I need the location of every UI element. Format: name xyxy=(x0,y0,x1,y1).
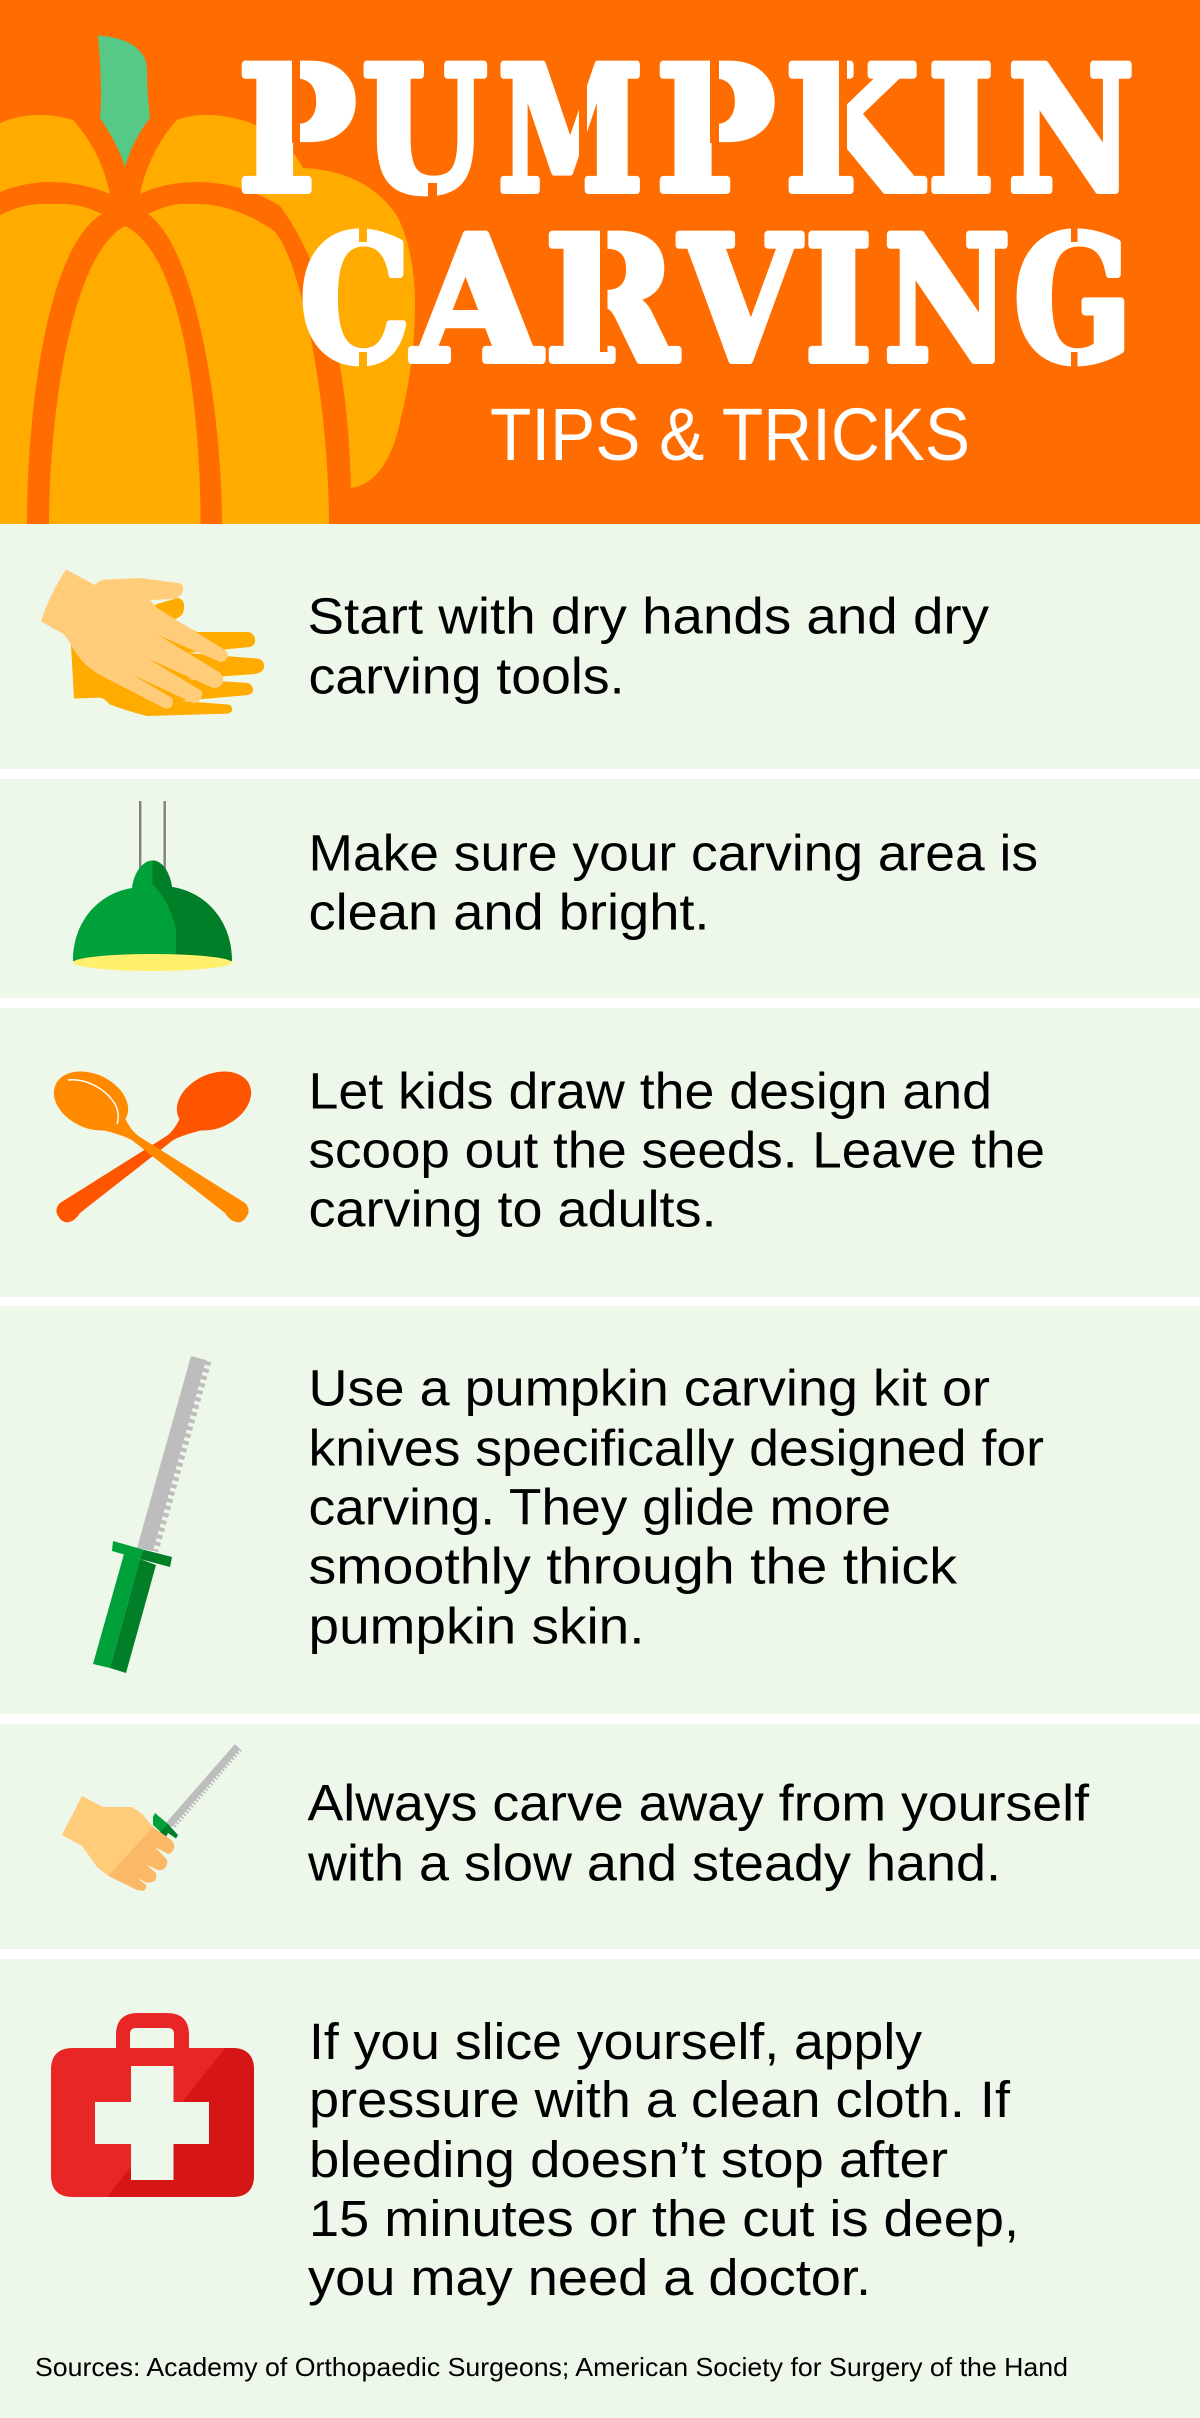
text: tip 4 xyxy=(308,1360,1044,1654)
icon: carving knife xyxy=(93,1356,207,1673)
icon: hanging lamp xyxy=(73,801,232,971)
text: tip 1: carving tools. xyxy=(308,648,624,704)
title: Pumpkin Carving: R xyxy=(545,198,678,401)
text: tip 3: carving to adults. xyxy=(308,1180,716,1238)
icon: hand holding knife xyxy=(62,1744,240,1891)
text: tip 3: Let kids draw the design and xyxy=(308,1062,992,1120)
title: Pumpkin Carving: K xyxy=(785,28,924,231)
panel: tip 2 bright area xyxy=(0,779,1200,998)
title: Pumpkin Carving: U xyxy=(362,28,487,231)
title: Pumpkin Carving xyxy=(242,60,1132,366)
text: tip 4: smoothly through the thick xyxy=(308,1538,958,1594)
title: Pumpkin Carving: M xyxy=(498,28,643,231)
text: tip 2: clean and bright. xyxy=(308,884,710,940)
panel: tip 6 first aid xyxy=(0,1959,1200,2418)
panel: tip 5 carve away xyxy=(0,1724,1200,1949)
text: tip 6: 15 minutes or the cut is deep, xyxy=(309,2190,1019,2247)
text: tip 4: carving. They glide more xyxy=(308,1478,891,1536)
text: tip 1 xyxy=(308,588,990,704)
text: tip 4: pumpkin skin. xyxy=(308,1598,644,1654)
title: Pumpkin Carving: P xyxy=(656,28,775,231)
text: tip 6: bleeding doesn’t stop after xyxy=(309,2131,948,2188)
text: tip 5: with a slow and steady hand. xyxy=(307,1834,1001,1892)
panel: header banner xyxy=(0,0,1200,524)
text: tip 6: pressure with a clean cloth. If xyxy=(309,2071,1011,2128)
text: tip 5 xyxy=(307,1774,1090,1892)
text: tip 4: knives specifically designed for xyxy=(308,1420,1044,1476)
text: tip 5: Always carve away from yourself xyxy=(308,1774,1090,1832)
text: tip 4: Use a pumpkin carving kit or xyxy=(308,1360,990,1416)
panel: tip 4 kit xyxy=(0,1306,1200,1714)
icon: first aid kit xyxy=(51,2013,254,2197)
title: Pumpkin Carving: C xyxy=(300,198,410,401)
text: tip 3 xyxy=(308,1062,1045,1238)
title: Pumpkin Carving: N xyxy=(884,198,1010,401)
title: Pumpkin Carving: I xyxy=(805,198,872,401)
text: tip 6 xyxy=(308,2013,1019,2306)
sources note: Sources: Academy of Orthopaedic Surgeons; American Society for Surgery of the Hand xyxy=(35,2352,1068,2382)
panel: tip 3 kids xyxy=(0,1008,1200,1297)
icon: crossed spoons xyxy=(44,1060,261,1222)
title: Pumpkin Carving: V xyxy=(678,198,801,401)
text: tip 1: Start with dry hands and dry xyxy=(308,588,990,644)
text: tip 6: you may need a doctor. xyxy=(308,2249,871,2306)
title: Pumpkin Carving: N xyxy=(1008,28,1134,231)
title: Pumpkin Carving: G xyxy=(1014,198,1132,401)
title: Pumpkin Carving: A xyxy=(411,198,542,401)
panel: tip 1 dry hands xyxy=(0,524,1200,769)
text: tip 2: Make sure your carving area is xyxy=(308,824,1038,882)
title: Pumpkin Carving: I xyxy=(928,28,994,231)
text: tip 2 xyxy=(308,824,1038,940)
subtitle: Tips & Tricks: TIPS & TRICKS xyxy=(490,393,970,476)
icon: hands xyxy=(41,570,264,716)
text: tip 6: If you slice yourself, apply xyxy=(309,2013,923,2070)
illustration: pumpkin xyxy=(0,36,415,524)
title: Pumpkin Carving: P xyxy=(238,28,356,231)
text: tip 3: scoop out the seeds. Leave the xyxy=(308,1122,1045,1178)
